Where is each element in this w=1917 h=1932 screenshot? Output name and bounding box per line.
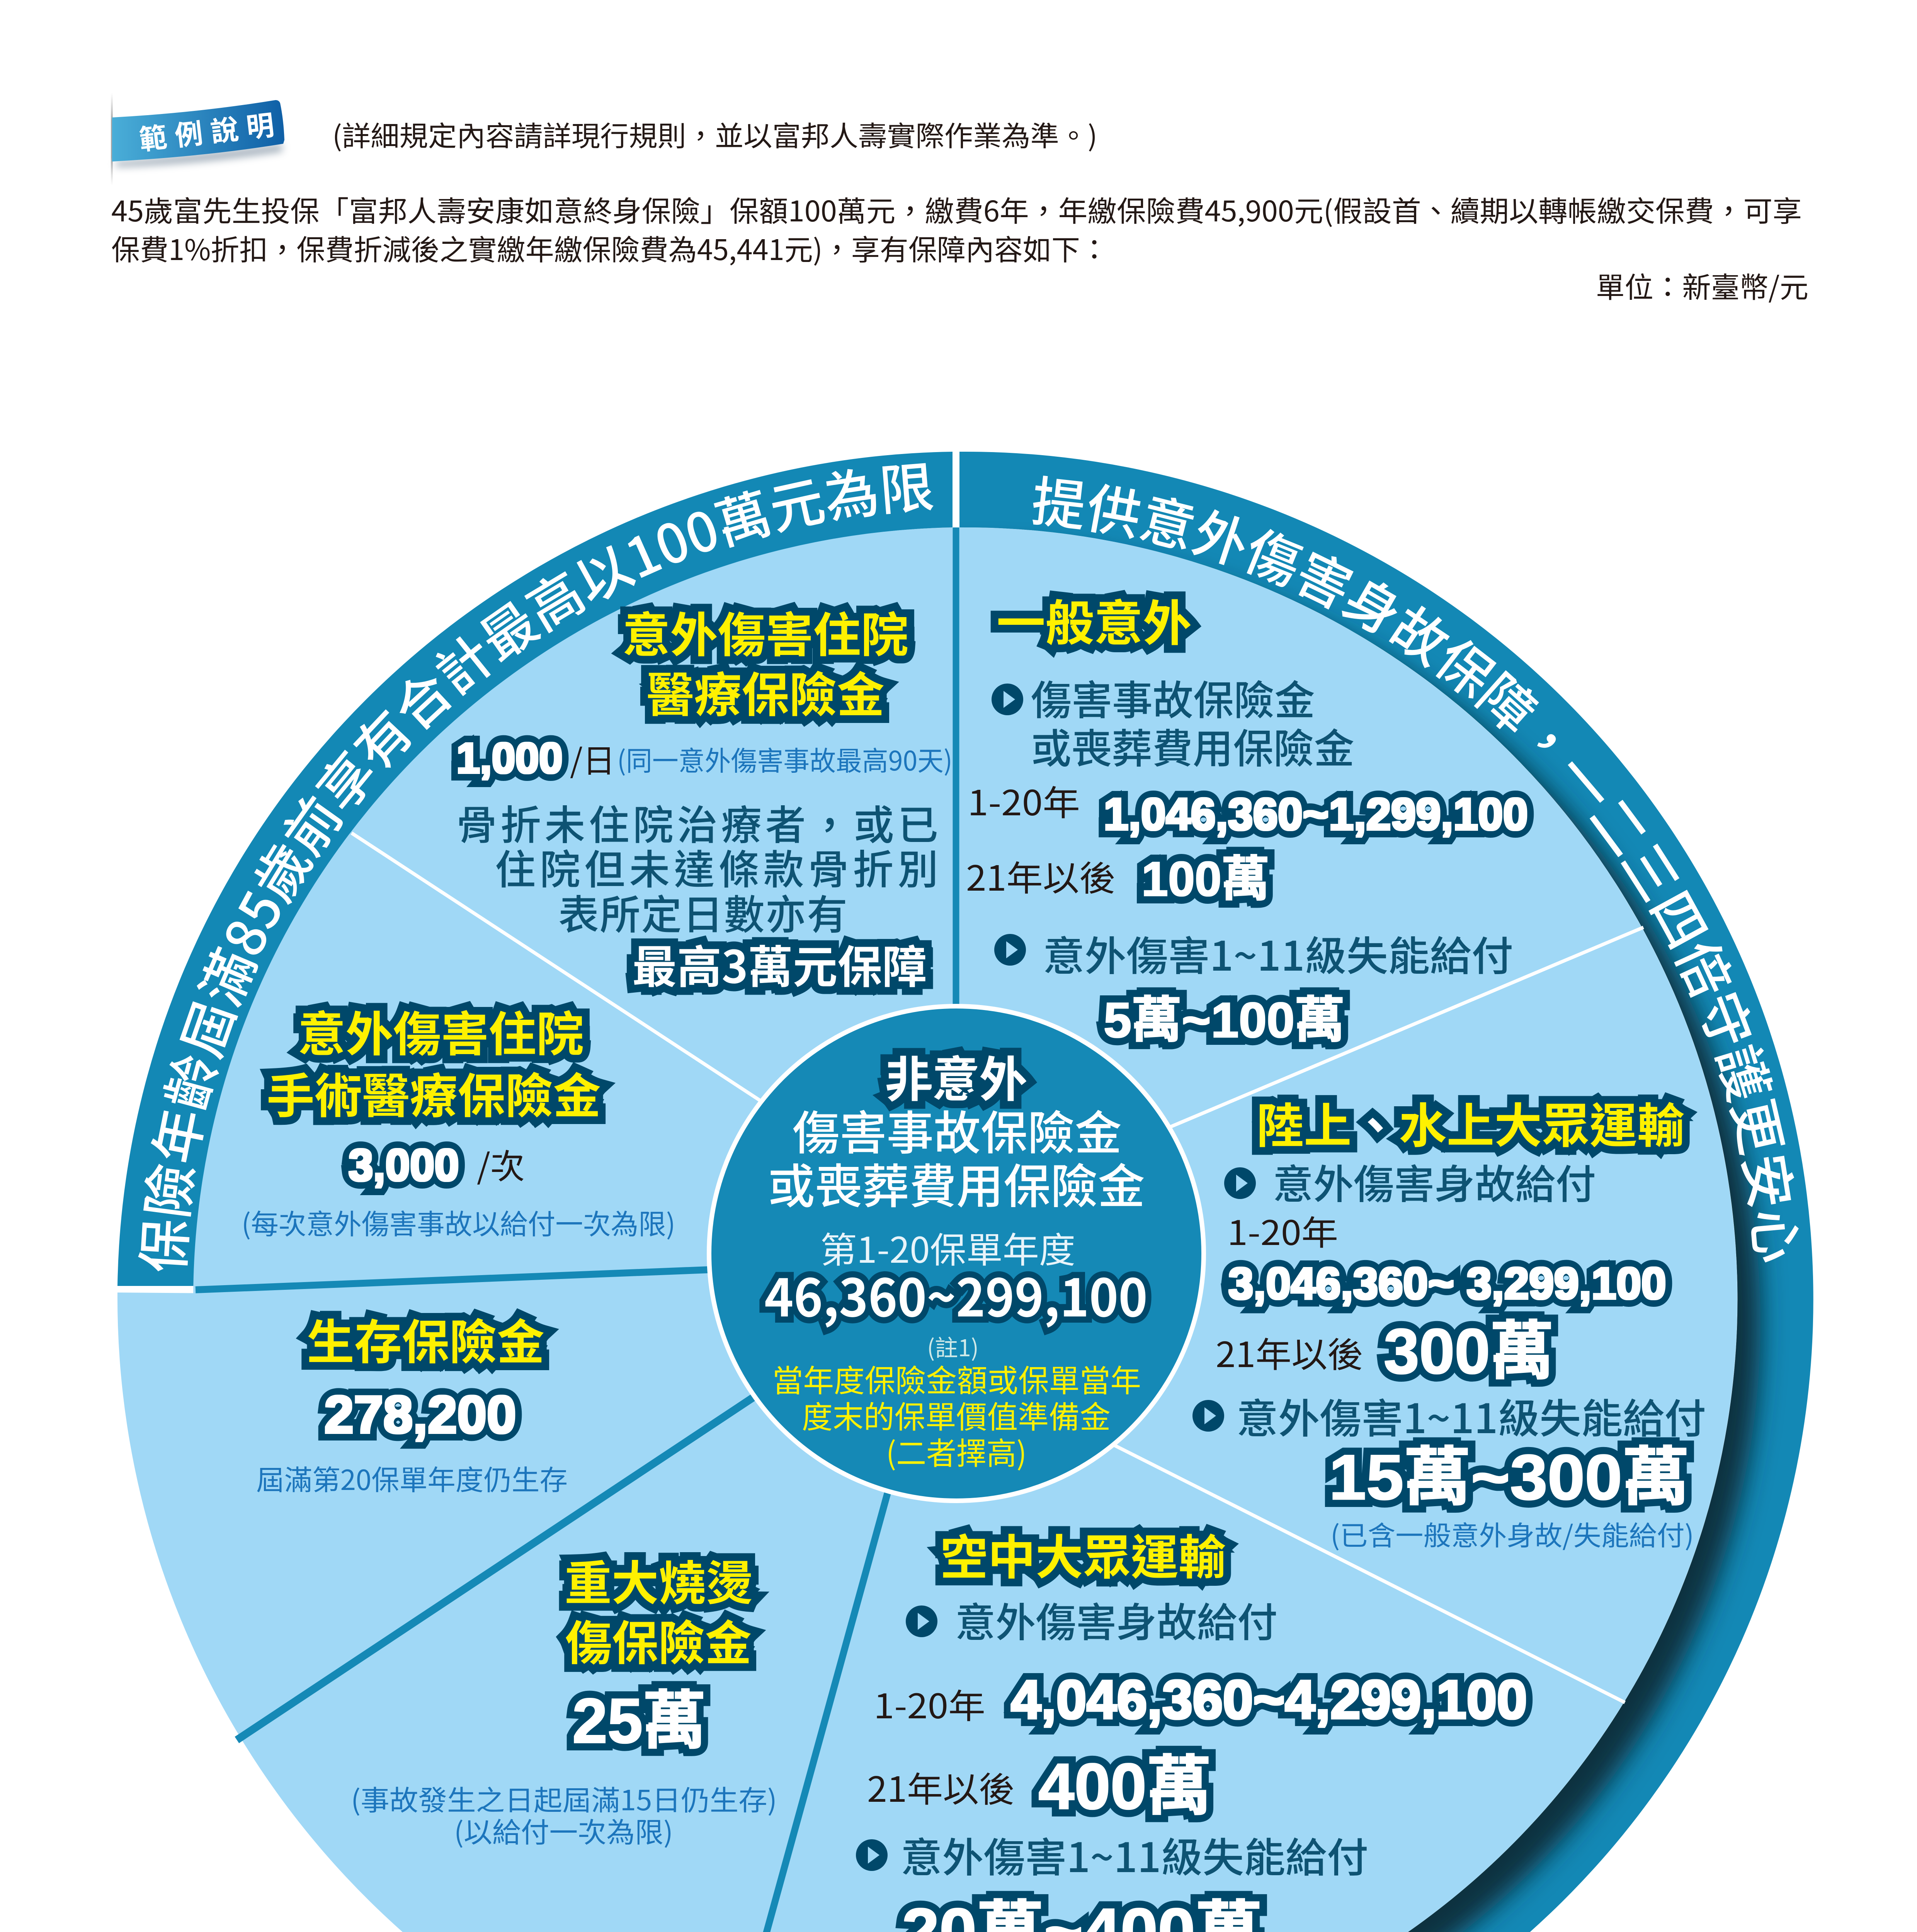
header: example ribbon bbox=[111, 93, 284, 185]
heading: 重大燒燙 bbox=[565, 1546, 753, 1614]
daily amount bbox=[456, 735, 953, 782]
note: (已含一般意外身故/失能給付) bbox=[1330, 1514, 1694, 1553]
yellow note: 度末的保單價值準備金 bbox=[802, 1393, 1111, 1437]
maximum: 最高3萬元保障 bbox=[632, 931, 927, 996]
heading bbox=[267, 996, 601, 1127]
notes: (以給付一次為限) bbox=[454, 1810, 673, 1850]
sector dividers bbox=[196, 527, 1643, 1932]
heading: 醫療保險金 bbox=[646, 657, 885, 726]
yellow note: 當年度保險金額或保單當年 bbox=[772, 1356, 1141, 1401]
ring inner shadow bbox=[1136, 546, 1779, 1932]
disability: 意外傷害1~11級失能給付 bbox=[1043, 924, 1513, 983]
years 21+: 300萬 bbox=[1384, 1316, 1554, 1387]
daily amount: /日 bbox=[570, 735, 615, 782]
note: (每次意外傷害事故以給付一次為限) bbox=[242, 1202, 675, 1242]
icon: bullet bbox=[1192, 1400, 1224, 1432]
death benefit: 意外傷害身故給付 bbox=[955, 1590, 1277, 1648]
heading: 傷保險金 bbox=[565, 1605, 752, 1674]
ring: left arc bbox=[117, 452, 953, 1286]
note: 屆滿第20保單年度仍生存 bbox=[256, 1458, 568, 1498]
ring: right arc bbox=[718, 452, 1813, 1932]
unit note: 單位：新臺幣/元 bbox=[1596, 265, 1808, 306]
policy years: 第1-20保單年度 bbox=[820, 1222, 1075, 1273]
benefit name bbox=[1031, 668, 1354, 775]
header note: (詳細規定內容請詳現行規則，並以富邦人壽實際作業為準。) bbox=[332, 114, 1097, 154]
benefit wheel bbox=[117, 452, 1813, 1932]
yellow note: (二者擇高) bbox=[886, 1429, 1027, 1474]
header: example ribbon: 範例說明 bbox=[137, 101, 284, 158]
years 21+ bbox=[867, 1750, 1211, 1823]
years 1-20: 1-20年 bbox=[968, 775, 1080, 825]
ring text left: 保險年齡屆滿85歲前享有合計最高以100萬元為限 bbox=[121, 444, 937, 1275]
heading: 一般意外 bbox=[997, 585, 1192, 655]
icon: bullet bbox=[906, 1605, 937, 1637]
years 21+: 100萬 bbox=[1141, 852, 1269, 906]
light inner disc bbox=[193, 527, 1737, 1932]
panel: general accident bbox=[966, 585, 1528, 1048]
benefit name: 或喪葬費用保險金 bbox=[768, 1149, 1145, 1217]
years 21+ bbox=[1216, 1316, 1554, 1387]
amount: /次 bbox=[477, 1139, 525, 1189]
amount: 3,000 bbox=[349, 1140, 459, 1190]
benefit name: 傷害事故保險金 bbox=[793, 1096, 1122, 1163]
benefit name: 傷害事故保險金 bbox=[1031, 668, 1315, 727]
panel: center non-accident bbox=[709, 1006, 1204, 1501]
ring text right: 提供意外傷害身故保障，一二三四倍守護更安心 bbox=[1028, 458, 1820, 1266]
years 21+ bbox=[966, 850, 1269, 906]
years 1-20: 1-20年 bbox=[874, 1679, 985, 1728]
panel: land and water transport bbox=[1192, 1088, 1706, 1553]
panel: surgery medical bbox=[242, 996, 675, 1242]
death benefit: 意外傷害身故給付 bbox=[1273, 1152, 1596, 1210]
benefit name bbox=[768, 1096, 1145, 1217]
years 21+: 21年以後 bbox=[966, 850, 1116, 901]
heading: 空中大眾運輸 bbox=[940, 1519, 1226, 1588]
description: 表所定日數亦有 bbox=[558, 883, 847, 941]
amount bbox=[349, 1139, 525, 1190]
icon: bullet bbox=[856, 1839, 888, 1871]
description bbox=[456, 793, 938, 941]
heading: 意外傷害住院 bbox=[298, 996, 584, 1065]
intro paragraph: 45歲富先生投保「富邦人壽安康如意終身保險」保額100萬元，繳費6年，年繳保險費45,900元(假設首、續期以轉帳繳交保費，可享 bbox=[111, 189, 1802, 230]
daily amount: 1,000 bbox=[456, 735, 563, 782]
years 1-20: 1,046,360~1,299,100 bbox=[1104, 789, 1528, 839]
heading: 生存保險金 bbox=[307, 1304, 544, 1373]
years 1-20: 4,046,360~4,299,100 bbox=[1011, 1669, 1527, 1730]
heading bbox=[565, 1546, 753, 1674]
years 21+: 21年以後 bbox=[867, 1762, 1015, 1812]
years 1-20 bbox=[968, 775, 1528, 839]
years 21+: 21年以後 bbox=[1216, 1327, 1363, 1377]
amount: 25萬 bbox=[572, 1685, 706, 1756]
notes bbox=[351, 1778, 777, 1850]
heading: 意外傷害住院 bbox=[623, 597, 908, 666]
amount: 278,200 bbox=[324, 1385, 516, 1444]
yellow note bbox=[772, 1356, 1141, 1474]
description: 骨折未住院治療者，或已 bbox=[456, 793, 938, 852]
heading: 手術醫療保險金 bbox=[267, 1058, 601, 1127]
icon: bullet bbox=[1224, 1167, 1256, 1199]
footnote mark: (註1) bbox=[927, 1330, 979, 1363]
disability amount: 5萬~100萬 bbox=[1104, 993, 1345, 1048]
intro paragraph: 保費1%折扣，保費折減後之實繳年繳保險費為45,441元)，享有保障內容如下： bbox=[111, 227, 1109, 269]
panel: air transport bbox=[856, 1519, 1527, 1932]
description: 住院但未達條款骨折別 bbox=[495, 837, 938, 896]
panel: burn benefit bbox=[351, 1546, 777, 1850]
amount: 46,360~299,100 bbox=[764, 1257, 1148, 1332]
daily amount: (同一意外傷害事故最高90天) bbox=[617, 740, 953, 779]
panel: survival benefit bbox=[256, 1304, 568, 1498]
heading: 陸上、水上大眾運輸 bbox=[1256, 1088, 1685, 1156]
disability: 意外傷害1~11級失能給付 bbox=[1237, 1386, 1706, 1445]
icon: bullet bbox=[992, 684, 1023, 715]
icon: bullet bbox=[994, 934, 1026, 966]
years 1-20 label: 1-20年 bbox=[1227, 1206, 1338, 1255]
disability amount: 15萬~300萬 bbox=[1329, 1442, 1689, 1513]
years 1-20 amount: 3,046,360~ 3,299,100 bbox=[1228, 1259, 1666, 1308]
intro paragraph bbox=[111, 189, 1802, 269]
outer light sector: lower left bbox=[117, 1293, 965, 1932]
panel: hospital medical bbox=[456, 597, 953, 996]
notes: (事故發生之日起屆滿15日仍生存) bbox=[351, 1778, 777, 1818]
heading: 非意外 bbox=[885, 1041, 1027, 1111]
years 21+: 400萬 bbox=[1038, 1750, 1211, 1823]
disability: 意外傷害1~11級失能給付 bbox=[901, 1825, 1368, 1884]
benefit name: 或喪葬費用保險金 bbox=[1031, 716, 1354, 775]
heading bbox=[623, 597, 908, 726]
